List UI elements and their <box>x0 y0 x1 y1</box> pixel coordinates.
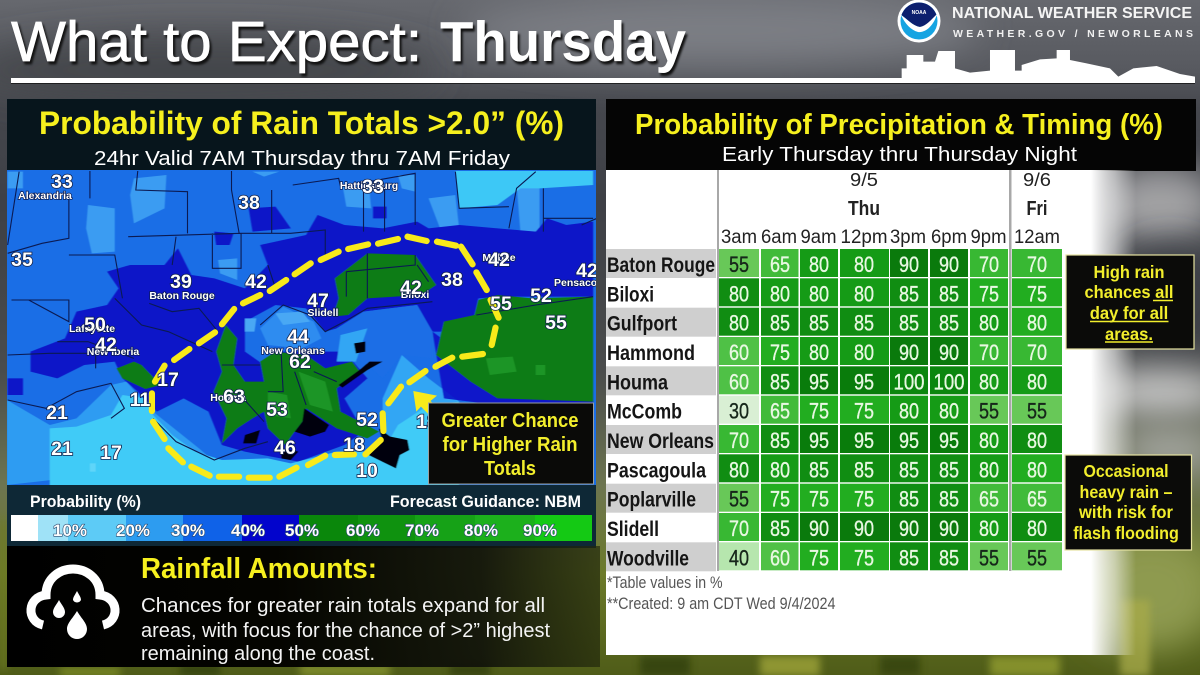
row: New Orleans: 80 <box>979 428 999 453</box>
map values: 47 <box>307 290 329 312</box>
row: Slidell: 70 <box>729 516 749 541</box>
map values: 44 <box>287 326 309 348</box>
row: Biloxi: 80 <box>854 281 874 306</box>
row: Hammond: 60 <box>729 340 749 365</box>
row: Pascagoula: 85 <box>854 457 874 482</box>
map values: 21 <box>51 438 73 460</box>
legend: probability colour scale: Probability (%) <box>30 492 141 511</box>
NWS web address: WEATHER.GOV / NEWORLEANS <box>953 28 1193 40</box>
map values: 42 <box>488 249 510 271</box>
city labels: Lafayette <box>69 323 115 335</box>
table footnotes <box>607 573 836 613</box>
row: Woodville: Woodville <box>607 547 689 570</box>
table header: 6am <box>761 227 797 248</box>
table header: 9pm <box>970 227 1006 248</box>
row: Slidell: 90 <box>899 516 919 541</box>
map values: 63 <box>223 386 245 408</box>
table header: 9/6 <box>1023 170 1051 190</box>
row: Gulfport: 80 <box>1027 311 1047 336</box>
row: Woodville: 55 <box>1027 545 1047 570</box>
city labels: Slidell <box>308 307 339 319</box>
row: Baton Rouge: 80 <box>809 252 829 277</box>
row: Slidell: 90 <box>809 516 829 541</box>
row: Baton Rouge: 90 <box>899 252 919 277</box>
row: Houma <box>606 366 1062 395</box>
row: Houma: 85 <box>770 369 790 394</box>
row: Houma: 100 <box>894 369 924 394</box>
row: Gulfport: 85 <box>939 311 959 336</box>
row: Biloxi <box>607 278 1062 306</box>
city labels: Houma <box>210 392 246 404</box>
table header: Thu <box>848 198 880 220</box>
row: Baton Rouge: 90 <box>939 252 959 277</box>
map values: 42 <box>400 277 422 299</box>
rainfall text: Chances for greater rain totals expand for all <box>141 595 545 617</box>
row: McComb: 55 <box>979 399 999 424</box>
legend: probability colour scale: 20% <box>116 521 150 540</box>
row: Woodville: 85 <box>899 545 919 570</box>
row: McComb: 30 <box>729 399 749 424</box>
row: Slidell: 85 <box>770 516 790 541</box>
map values: 35 <box>11 249 33 271</box>
rainfall text: areas, with focus for the chance of >2” highest <box>141 620 550 642</box>
city labels <box>18 180 606 404</box>
callout: greater chance <box>428 403 594 484</box>
row: New Orleans: 85 <box>770 428 790 453</box>
map values: 42 <box>245 271 267 293</box>
row: New Orleans: 95 <box>939 428 959 453</box>
row: Biloxi: 75 <box>1027 281 1047 306</box>
map values: 10 <box>356 460 378 482</box>
callout: high rain chances <box>1066 255 1194 349</box>
row: Woodville <box>606 542 1062 571</box>
row: Slidell: Slidell <box>607 518 659 541</box>
table header: 9/5 <box>850 170 878 190</box>
map values: 62 <box>289 351 311 373</box>
panel: precipitation heading: Probability of Precipitation & Timing (%) <box>635 109 1163 141</box>
row: Poplarville <box>606 484 1062 513</box>
row: Slidell: 90 <box>854 516 874 541</box>
row: Baton Rouge: 65 <box>770 252 790 277</box>
legend: probability colour scale: 90% <box>523 521 557 540</box>
panel: rain probability heading: Probability of Rain Totals >2.0” (%) <box>39 105 564 141</box>
callout: high rain chances: chances all <box>1084 282 1174 302</box>
row: Baton Rouge: 80 <box>854 252 874 277</box>
table header: 3pm <box>890 227 926 248</box>
row: Gulfport: 85 <box>770 311 790 336</box>
table footnotes: *Table values in % <box>607 573 723 592</box>
legend: probability colour scale: 70% <box>405 521 439 540</box>
row: New Orleans: 80 <box>1027 428 1047 453</box>
row: McComb: 75 <box>809 399 829 424</box>
row: Slidell: 80 <box>1027 516 1047 541</box>
row: Houma: 60 <box>729 369 749 394</box>
row: Poplarville: 85 <box>939 487 959 512</box>
row: Gulfport: 85 <box>854 311 874 336</box>
row: Baton Rouge: 55 <box>729 252 749 277</box>
row: Biloxi: Biloxi <box>607 283 654 306</box>
map values: 39 <box>170 271 192 293</box>
row: Gulfport: 85 <box>899 311 919 336</box>
map values: 18 <box>343 434 365 456</box>
row: Hammond: 75 <box>770 340 790 365</box>
rainfall heading: Rainfall Amounts: <box>141 553 377 585</box>
row: Hammond: Hammond <box>607 342 695 365</box>
row: Houma: Houma <box>607 371 668 394</box>
row: New Orleans: 95 <box>809 428 829 453</box>
row: McComb: 75 <box>854 399 874 424</box>
legend: probability colour scale <box>7 485 596 548</box>
rainfall text <box>141 595 550 665</box>
table header: 6pm <box>931 227 967 248</box>
city labels: Baton Rouge <box>149 290 215 302</box>
table header: 9am <box>800 227 836 248</box>
row: Pascagoula: Pascagoula <box>607 459 706 482</box>
legend: probability colour scale: 50% <box>285 521 319 540</box>
row: Poplarville: 75 <box>809 487 829 512</box>
row: Woodville: 40 <box>729 545 749 570</box>
map values: 50 <box>84 314 106 336</box>
city labels: Alexandria <box>18 190 72 202</box>
city labels: New Iberia <box>87 346 139 358</box>
legend: probability colour scale: 10% <box>53 521 87 540</box>
row: Hammond: 90 <box>899 340 919 365</box>
row: Poplarville: 75 <box>770 487 790 512</box>
title: Thursday <box>440 10 686 74</box>
row: Woodville: 75 <box>809 545 829 570</box>
row: Pascagoula: 85 <box>939 457 959 482</box>
map values: 52 <box>356 409 378 431</box>
row: Hammond <box>607 337 1062 365</box>
row: Woodville: 75 <box>854 545 874 570</box>
map values: 17 <box>100 442 122 464</box>
row: Hammond: 80 <box>854 340 874 365</box>
map values: 17 <box>157 369 179 391</box>
city labels: Pensacola <box>554 277 606 289</box>
panel: precipitation heading <box>606 99 1196 171</box>
callout: occasional heavy rain: heavy rain – <box>1080 482 1173 502</box>
row: Poplarville: 65 <box>979 487 999 512</box>
callout: greater chance: Totals <box>484 458 536 480</box>
table header: 3am <box>721 227 757 248</box>
row: Biloxi: 85 <box>899 281 919 306</box>
row: Woodville: 85 <box>939 545 959 570</box>
row: Pascagoula: 80 <box>1027 457 1047 482</box>
row: Pascagoula: 80 <box>979 457 999 482</box>
callout: greater chance: for Higher Rain <box>442 434 578 456</box>
row: New Orleans: 95 <box>899 428 919 453</box>
row: Poplarville: 65 <box>1027 487 1047 512</box>
callout: high rain chances: day for all <box>1090 303 1168 323</box>
table header: 12am <box>1014 227 1060 248</box>
legend: probability colour scale: 40% <box>231 521 265 540</box>
row: Pascagoula: 85 <box>899 457 919 482</box>
row: Biloxi: 80 <box>770 281 790 306</box>
row: New Orleans: New Orleans <box>607 430 714 453</box>
row: New Orleans: 95 <box>854 428 874 453</box>
NWS name: NATIONAL WEATHER SERVICE <box>952 5 1192 22</box>
NOAA logo <box>898 0 940 42</box>
map values: 38 <box>441 269 463 291</box>
NOAA logo: NOAA <box>912 10 927 16</box>
panel: timing table <box>606 170 1136 655</box>
row: Gulfport: 80 <box>729 311 749 336</box>
map values <box>11 171 598 482</box>
row: Slidell: 80 <box>979 516 999 541</box>
panel: rain probability heading: 24hr Valid 7AM Thursday thru 7AM Friday <box>94 147 511 170</box>
row: Houma: 95 <box>809 369 829 394</box>
map: probability of rain totals <box>7 170 606 485</box>
city labels: New Orleans <box>261 345 325 357</box>
callout: occasional heavy rain: Occasional <box>1084 461 1168 481</box>
row: Pascagoula <box>607 454 1062 482</box>
row: Houma: 80 <box>1027 369 1047 394</box>
row: Hammond: 90 <box>939 340 959 365</box>
row: Houma: 95 <box>854 369 874 394</box>
map values: 42 <box>95 334 117 356</box>
row: New Orleans: 70 <box>729 428 749 453</box>
row: Baton Rouge: 70 <box>979 252 999 277</box>
row: Hammond: 70 <box>979 340 999 365</box>
map values: 46 <box>274 437 296 459</box>
header rule and skyline <box>11 50 1195 84</box>
callout: high rain chances: High rain <box>1094 262 1164 282</box>
row: Hammond: 70 <box>1027 340 1047 365</box>
map values: 55 <box>490 293 512 315</box>
row: Baton Rouge <box>606 249 1062 278</box>
row: Woodville: 55 <box>979 545 999 570</box>
panel: rainfall amounts <box>7 546 600 667</box>
row: Gulfport: 80 <box>979 311 999 336</box>
row: Hammond: 80 <box>809 340 829 365</box>
row: McComb: McComb <box>607 401 682 424</box>
map values: 52 <box>530 285 552 307</box>
table header: 12pm <box>840 227 888 248</box>
row: Houma: 80 <box>979 369 999 394</box>
legend: probability colour scale: 30% <box>171 521 205 540</box>
row: Poplarville: 85 <box>899 487 919 512</box>
panel: precipitation heading: Early Thursday thru Thursday Night <box>722 143 1077 166</box>
row: Baton Rouge: Baton Rouge <box>607 254 715 277</box>
city labels: Biloxi <box>401 289 429 301</box>
row: Biloxi: 75 <box>979 281 999 306</box>
rainfall text: remaining along the coast. <box>141 643 375 665</box>
row: Poplarville: 75 <box>854 487 874 512</box>
row: McComb: 80 <box>939 399 959 424</box>
city labels: Hattiesburg <box>340 180 398 192</box>
row: Pascagoula: 80 <box>770 457 790 482</box>
title <box>11 10 686 74</box>
row: Gulfport: Gulfport <box>607 313 677 336</box>
legend: probability colour scale: 80% <box>464 521 498 540</box>
legend: probability colour scale: Forecast Guidance: NBM <box>390 492 581 511</box>
row: Woodville: 60 <box>770 545 790 570</box>
row: McComb: 80 <box>899 399 919 424</box>
map values: 21 <box>46 402 68 424</box>
table footnotes: **Created: 9 am CDT Wed 9/4/2024 <box>607 594 836 613</box>
city labels: Mobile <box>482 252 516 264</box>
row: Biloxi: 80 <box>809 281 829 306</box>
table header: Fri <box>1026 198 1048 220</box>
row: Pascagoula: 80 <box>729 457 749 482</box>
map values: 42 <box>576 260 598 282</box>
row: Slidell <box>607 513 1062 541</box>
title: What to Expect: <box>11 10 422 74</box>
map values: 33 <box>362 176 384 198</box>
row: New Orleans <box>606 425 1062 454</box>
map values: 11 <box>130 389 150 411</box>
row: Poplarville: Poplarville <box>607 489 696 512</box>
row: Houma: 100 <box>934 369 964 394</box>
row: Biloxi: 85 <box>939 281 959 306</box>
icon: rain cloud <box>31 569 115 639</box>
map values: 18 <box>416 411 438 433</box>
map values: 33 <box>51 171 73 193</box>
callout: occasional heavy rain: flash flooding <box>1073 523 1179 543</box>
row: Gulfport <box>606 308 1062 337</box>
row: McComb <box>607 396 1062 424</box>
callout: occasional heavy rain <box>1065 455 1192 550</box>
legend: probability colour scale: 60% <box>346 521 380 540</box>
table header <box>721 170 1060 248</box>
row: Biloxi: 80 <box>729 281 749 306</box>
row: Gulfport: 85 <box>809 311 829 336</box>
row: Baton Rouge: 70 <box>1027 252 1047 277</box>
map values: 53 <box>266 399 288 421</box>
callout: high rain chances: areas. <box>1105 324 1153 344</box>
row: Poplarville: 55 <box>729 487 749 512</box>
callout: occasional heavy rain: with risk for <box>1078 502 1173 522</box>
row: McComb: 55 <box>1027 399 1047 424</box>
map values: 55 <box>545 312 567 334</box>
row: McComb: 65 <box>770 399 790 424</box>
row: Pascagoula: 85 <box>809 457 829 482</box>
callout: greater chance: Greater Chance <box>442 410 578 432</box>
panel: rain probability heading <box>7 99 596 171</box>
row: Slidell: 90 <box>939 516 959 541</box>
map values: 38 <box>238 192 260 214</box>
